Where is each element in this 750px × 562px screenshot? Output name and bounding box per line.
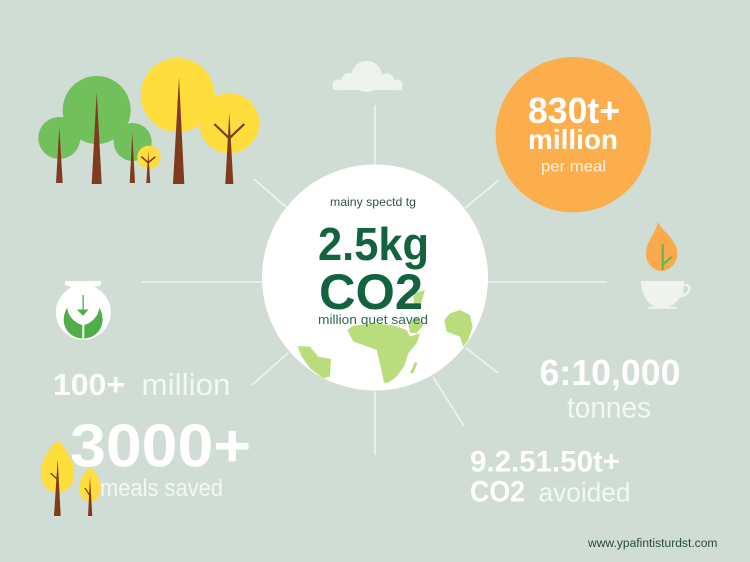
circle caption: million quet saved bbox=[318, 312, 428, 327]
stat: 100+ million: 100+ bbox=[53, 367, 125, 402]
panel: central white circle bbox=[262, 164, 488, 390]
stat label: million: million bbox=[528, 124, 618, 155]
stat: 6:10,000 tonnes bbox=[540, 352, 680, 424]
website url: www.ypafintisturdst.com bbox=[587, 538, 718, 550]
stat: 100+ million: million bbox=[142, 367, 230, 402]
icon: teacup with leaf bbox=[641, 222, 691, 309]
stat: 6:10,000 tonnes: 6:10,000 bbox=[540, 352, 680, 393]
stat: 6:10,000 tonnes: tonnes bbox=[567, 392, 651, 424]
stat: 9.2.51.50t+ CO2 avoided bbox=[470, 446, 630, 508]
infographic canvas bbox=[38, 57, 717, 550]
world map bbox=[298, 290, 473, 383]
illustration: forest of trees bbox=[38, 58, 259, 184]
stat: 830t+: 830t+ bbox=[528, 90, 620, 131]
stat: 3000+ meals saved bbox=[70, 412, 251, 502]
icon: cloud bbox=[332, 61, 402, 92]
icon: yellow trees bbox=[41, 440, 101, 516]
panel: orange stat circle bbox=[496, 57, 651, 212]
stat: 100+ million bbox=[53, 367, 230, 402]
stat: 9.2.51.50t+ CO2 avoided: avoided bbox=[538, 478, 630, 508]
circle intro text: mainy spectd tg bbox=[330, 195, 416, 209]
headline: CO2: CO2 bbox=[319, 264, 423, 320]
stat: 9.2.51.50t+ CO2 avoided: 9.2.51.50t+ bbox=[470, 446, 620, 478]
stat: 9.2.51.50t+ CO2 avoided: CO2 bbox=[470, 476, 525, 508]
stat caption: per meal: per meal bbox=[541, 158, 606, 176]
stat: 3000+ meals saved: meals saved bbox=[100, 475, 223, 502]
stat: 3000+ meals saved: 3000+ bbox=[70, 412, 251, 480]
icon: jar with sprout bbox=[56, 281, 111, 340]
tree trunks bbox=[56, 77, 244, 184]
headline: 2.5kg: 2.5kg bbox=[318, 218, 429, 270]
tree canopies bbox=[38, 58, 259, 169]
